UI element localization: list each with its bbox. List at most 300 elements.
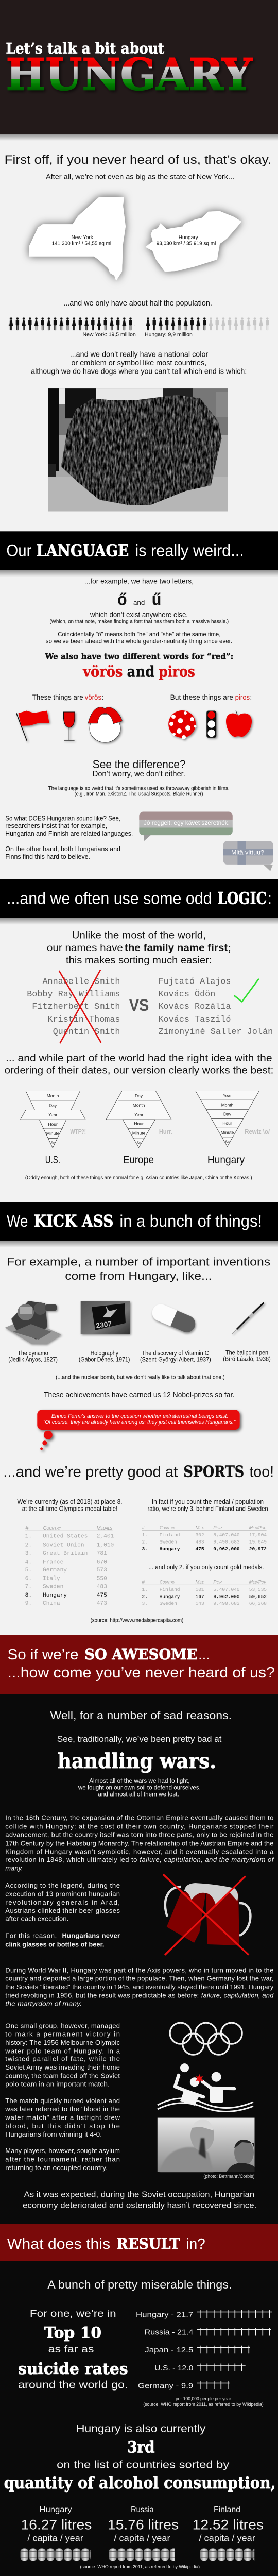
sports text right: In fact if you count the medal / population [152, 1498, 264, 1505]
paragraph: water polo: blood, but this didn’t stop the [5, 2122, 120, 2130]
date chart: Europe: Sc [137, 1141, 141, 1145]
date chart: U.S.: Day [49, 1103, 57, 1108]
table: gold medals per population: Med/Pop [249, 1580, 266, 1585]
table: medals per population: 9,490,683 [213, 1539, 240, 1545]
population labels: Hungary: 9,9 million [145, 332, 193, 338]
see the difference text: See the difference? [93, 758, 185, 771]
icon: apple [226, 711, 252, 737]
table: gold medals per population [142, 1580, 267, 1606]
date chart: Europe: Month [133, 1103, 145, 1108]
names list: hungarian: Zimonyiné Saller Jolán [159, 1027, 273, 1037]
heading: result: RESULT [116, 2235, 180, 2252]
date chart: Hungary: Hour [222, 1121, 232, 1126]
paragraph: water polo: was later referred to the "blood in the [5, 2105, 120, 2113]
names list: hungarian: Kovács Ödön [159, 989, 215, 999]
stat: Hungary alcohol: Hungary [39, 2505, 72, 2514]
finnish text: On the other hand, both Hungarians and [5, 845, 120, 853]
inventions captions: Holography [91, 1351, 118, 1357]
sports heading: ...and we’re pretty good at [3, 1463, 178, 1480]
history paragraph: 16th century: Kingdom of Hungary wasn’t symbiotic, however, and it eventually escalated into a [5, 1848, 274, 1856]
icon row: Hungary people black [146, 317, 209, 330]
sad reasons text: Almost all of the wars we had to fight, [89, 1778, 189, 1784]
table: all time medals: 2. [25, 1543, 32, 1549]
history paragraph: world war II: country and deported a large portion of the populace. Then, when Germany lost the war, [5, 1974, 273, 1982]
table: medals per population: Sweden [160, 1539, 177, 1545]
names list: hungarian [159, 977, 273, 1037]
date chart captions: (Oddly enough, both of these things are normal for e.g. Asian countries like Japan, China or the Koreas.) [25, 1175, 252, 1181]
two letters text: (Which, on that note, makes finding a font that has them both a massive hassle.) [49, 619, 229, 624]
stat: Hungary alcohol [20, 2505, 92, 2561]
chart: suicide rates: Japan - 12.5 [145, 2346, 193, 2354]
history paragraph: 16th century: collide with Hungary: at the cost of their own country, Hungarians stopped their [5, 1823, 274, 1830]
see the difference text: Don’t worry, we don’t either. [93, 770, 185, 778]
red words heading: vörös [82, 663, 123, 680]
heading: logic: LOGIC [217, 889, 267, 908]
alcohol statement: Hungary is also currently [76, 2423, 206, 2435]
table: all time medals: 473 [97, 1601, 107, 1607]
icon: red wine glass [64, 712, 75, 740]
paragraph: water polo: Soviet Army was invading their home [5, 2063, 120, 2071]
table: medals per population: Hungary [160, 1546, 180, 1552]
date chart: U.S.: Sc [51, 1142, 55, 1145]
population comparison [8, 299, 271, 338]
gold medals text: ... and only 2. if you only count gold medals. [149, 1564, 264, 1571]
Hungary label: 93,030 km² / 35,919 sq mi [157, 241, 216, 247]
heading: kick ass: KICK ASS [33, 1212, 113, 1231]
economy text: As it was expected, during the Soviet occupation, Hungarian [24, 2190, 254, 2199]
map: Hungary [145, 211, 241, 272]
alcohol notes: (source: WHO report from 2011, as referred to by Wikipedia) [80, 2564, 200, 2570]
economy text: economy deteriorated and ostensibly hasn’t recovered since. [23, 2201, 256, 2210]
chart note: (source: WHO report from 2011, as referred to by Wikipedia) [143, 2402, 264, 2408]
table: gold medals per population: 53,535 [249, 1587, 267, 1592]
table: medals per population: 5,407,040 [213, 1532, 240, 1538]
history paragraph: world war II: failure, capitulation, and [201, 1991, 274, 1999]
history paragraph: world war II [5, 1966, 274, 2008]
table: medals per population: # [142, 1525, 145, 1531]
sad reasons text: handling wars. [58, 1749, 216, 1773]
finnish text: Hungarian and Finnish are related languages. [5, 829, 133, 837]
date chart captions [25, 1154, 252, 1181]
table: all time medals: Sweden [43, 1584, 63, 1590]
sports text left: We’re currently (as of 2013) at place 8. [17, 1498, 123, 1505]
photo: puli dog [48, 388, 228, 511]
paragraph: water polo: after the tournament, rather than [5, 2156, 120, 2163]
table: medals per population: 1. [142, 1532, 148, 1538]
suicide rate statement: around the world go. [18, 2379, 128, 2391]
date chart captions: Hungary [207, 1154, 245, 1166]
stat: Russia alcohol: 15.76 litres [108, 2517, 179, 2532]
speech bubble: Hungarian [139, 812, 233, 841]
alcohol statement: 3rd [127, 2437, 155, 2457]
table: gold medals per population: 3. [142, 1601, 148, 1606]
icon: polka dot ball [168, 710, 197, 739]
names intro text: our names have [47, 942, 123, 954]
date chart: Europe: Year [134, 1112, 143, 1117]
stat: Russia alcohol [108, 2505, 179, 2561]
heading: so awesome [7, 1646, 275, 1681]
date chart: U.S.: Year [48, 1112, 57, 1117]
red words heading: piros [159, 663, 195, 680]
paragraph: beer legend: Hungarians never [62, 1931, 120, 1939]
inventions captions: The ballpoint pen [225, 1350, 268, 1356]
red cross over western names [59, 970, 101, 1043]
sports text left: at the all time Olympics medal table! [22, 1505, 117, 1512]
sad reasons text: Well, for a number of sad reasons. [50, 1709, 232, 1722]
table: gold medals per population: Country [160, 1580, 176, 1585]
two letters text: which don’t exist anywhere else. [90, 611, 188, 619]
table: gold medals per population: 143 [196, 1601, 204, 1606]
inventions captions: (Szent-Györgyi Albert, 1937) [140, 1357, 211, 1363]
stat: Finland alcohol: 12.52 litres [193, 2517, 264, 2532]
Hungary label: Hungary [179, 235, 198, 241]
sad reasons text: we fought on our own soil to defend ourselves, [78, 1785, 201, 1791]
names list: hungarian: Kovács Rozália [159, 1002, 231, 1012]
two letters text [46, 577, 232, 645]
inventions intro: come from Hungary, like... [65, 1269, 212, 1282]
chart: suicide rates: Russia - 21.4 [145, 2328, 193, 2336]
heading: so awesome: ...how come you’ve never heard of us? [7, 1665, 275, 1681]
table: medals per population: 19,649 [249, 1539, 267, 1545]
sports text right [147, 1498, 268, 1512]
table: gold medals per population: # [142, 1580, 145, 1585]
inventions captions [8, 1350, 271, 1363]
section band: language [0, 531, 278, 577]
date chart: U.S.: Month [47, 1093, 59, 1098]
thought bubble: Fermi quote: Enrico Fermi’s answer to the question whether extraterrestrial beings exist: [51, 1413, 228, 1419]
table: medals per population: Med [196, 1525, 204, 1531]
icon: red-haired head [88, 707, 123, 742]
table: gold medals per population: Med [196, 1580, 204, 1585]
history paragraph: 16th century: advancement, but the country itself was torn into three parts, only to be rejoined in the [5, 1831, 273, 1838]
history paragraph: world war II: During World War II, Hungary was part of the Axis powers, who in turn moved in to the [5, 1966, 273, 1974]
table: all time medals: 670 [97, 1559, 107, 1565]
date chart: Hungary: Day [223, 1112, 232, 1117]
section band: so awesome [0, 1635, 278, 1694]
inventions captions: (Bíró László, 1938) [223, 1357, 271, 1363]
table: all time medals: Medals [97, 1525, 113, 1531]
chart: suicide rates: Germany - 9.9 [138, 2381, 193, 2391]
date chart label: WTF: WTF?! [70, 1128, 86, 1136]
New York label: 141,300 km² / 54,55 sq mi [51, 241, 111, 247]
finnish text: researchers insist that for example, [5, 822, 107, 829]
date chart: Hungary: Minute [221, 1130, 234, 1135]
table: gold medals per population: Sweden [160, 1601, 177, 1606]
heading: result: What does this [7, 2236, 110, 2252]
paragraph: water polo: polo team in an important match. [5, 2080, 110, 2088]
speech bubble: Finnish: Mitä vittuu? [231, 849, 264, 856]
names intro text: Unlike the most of the world, [72, 930, 206, 941]
barrels: Finland [200, 2548, 254, 2561]
table: all time medals: 9. [25, 1601, 32, 1607]
table: all time medals: 7. [25, 1584, 32, 1590]
table: all time medals: 1. [25, 1534, 32, 1540]
table: gold medals per population: 9,490,683 [213, 1601, 240, 1606]
red words heading [45, 652, 233, 680]
finnish text: So what DOES Hungarian sound like? See, [5, 815, 120, 822]
stat: Russia alcohol: Russia [131, 2505, 154, 2514]
sports heading: too! [249, 1463, 274, 1480]
names intro text [47, 930, 231, 966]
icon row: Hungary people grey [209, 317, 272, 330]
speech bubble: Hungarian: Jó reggelt, egy kávét szeretnék. [144, 819, 230, 826]
table: all time medals [25, 1525, 114, 1607]
table: all time medals: China [43, 1601, 60, 1607]
names intro text: this makes sorting much easier: [66, 955, 212, 966]
sports heading [3, 1463, 274, 1481]
table: all time medals: Soviet Union [43, 1543, 84, 1549]
title: HUNGARY: HUNGARY [6, 49, 253, 101]
names list: western: Annabelle Smith [42, 977, 120, 987]
table: all time medals: France [43, 1559, 63, 1565]
paragraph: water polo: to mark a permanent victory in [5, 2030, 120, 2038]
section band: kick ass [0, 1202, 278, 1247]
paragraph: water polo: history: The 1956 Melbourne Olympic [5, 2039, 120, 2046]
stat: Russia alcohol: / capita / year [114, 2533, 170, 2543]
heading: language: LANGUAGE [37, 541, 129, 561]
suicide rate statement: Top 10 [44, 2324, 101, 2342]
New York label: New York [71, 235, 94, 241]
nobel text: These achievements have earned us 12 Nobel-prizes so far. [44, 1391, 234, 1399]
history paragraph: 16th century: revolution in 1848, which ultimately led to [5, 1856, 137, 1863]
see the difference text: The language is so weird that it’s sometimes used as throwaway gibberish in films. [48, 785, 230, 791]
names list: western [27, 977, 120, 1037]
suicide rate statement: as far as [48, 2344, 94, 2355]
history paragraph: 16th century [5, 1814, 274, 1872]
paragraph: beer legend: Austrians clinked their beer glasses [5, 1907, 120, 1914]
inventions captions: The discovery of Vitamin C [142, 1351, 209, 1357]
paragraph: beer legend [5, 1882, 120, 1948]
heading: result [7, 2235, 205, 2252]
icon: red flag [16, 711, 49, 741]
paragraph: beer legend: revolutionary generals in Arad, [5, 1899, 120, 1906]
names list: western: Bobby Ray Williams [27, 990, 120, 999]
table: all time medals: 781 [97, 1551, 107, 1557]
column heads: vörös and piros: But these things are [170, 693, 233, 701]
green check [234, 979, 259, 1002]
two letters text: Coincidentally "ő" means both "he" and "she" at the same time, [58, 631, 220, 638]
table: all time medals: Country [43, 1525, 61, 1531]
section band: logic [0, 879, 278, 925]
heading: kick ass: We [7, 1212, 28, 1230]
table: gold medals per population: 9,962,000 [213, 1594, 240, 1600]
paragraph: water polo: water polo team of Hungary. In a [5, 2047, 120, 2055]
date chart: Europe: Hour [134, 1121, 144, 1126]
paragraph: water polo: country, the team faced off the Soviet [5, 2072, 120, 2079]
inventions intro [7, 1255, 270, 1282]
table: gold medals per population: Hungary [160, 1594, 180, 1600]
table: medals per population [142, 1525, 267, 1552]
date chart: Hungary: Sc [225, 1141, 230, 1144]
date chart: Europe: Minute [132, 1130, 146, 1136]
chart note: per 100,000 people per year [176, 2396, 231, 2402]
column heads: vörös and piros: piros [235, 693, 250, 701]
cross bars: Russia [197, 2329, 271, 2332]
photo: bloodied water polo player [158, 2118, 254, 2172]
table: all time medals: 573 [97, 1567, 107, 1573]
heading: kick ass: in a bunch of things! [119, 1212, 262, 1230]
dates intro: ordering of their dates, our version clearly works the best: [5, 1065, 273, 1076]
inventions captions: (Gábor Dénes, 1971) [79, 1357, 130, 1363]
table: gold medals per population: 2. [142, 1594, 148, 1600]
heading: logic: : [267, 889, 272, 908]
history paragraph: world war II: the Soviets "liberated" the country in 1945, and eventually stayed there until 1991. Hungary [5, 1983, 274, 1991]
table: all time medals: 4. [25, 1559, 32, 1565]
table: gold medals per population: 167 [196, 1594, 204, 1600]
names list: western: Quentin Smith [53, 1027, 120, 1037]
see the difference text: (e.g., Iron Man, eXistenZ, The Usual Suspects, Blade Runner) [75, 791, 203, 798]
date chart: Europe [106, 1091, 171, 1148]
heading: kick ass [7, 1212, 262, 1231]
paragraph: water polo: Hungarians from winning it 4-0. [5, 2130, 102, 2138]
icon: olympic rings [170, 2023, 242, 2055]
paragraph: beer legend: after each execution. [5, 1915, 68, 1923]
image: vitamin C pill [150, 1301, 198, 1335]
history paragraph: world war II: the martyrdom of many. [5, 2000, 82, 2008]
sports text right: ratio, we’re only 3. behind Finland and Sweden [147, 1505, 268, 1512]
stat: Finland alcohol: / capita / year [199, 2533, 255, 2543]
table: medals per population: 483 [196, 1539, 204, 1545]
paragraph: water polo: The match quickly turned violent and [5, 2097, 120, 2105]
inventions captions: The dynamo [18, 1351, 48, 1357]
paragraph: beer legend: According to the legend, during the [5, 1882, 120, 1889]
chart note [143, 2396, 264, 2408]
table: medals per population: 17,904 [249, 1532, 267, 1538]
table: gold medals per population: 66,368 [249, 1601, 267, 1606]
table: gold medals per population: Pop [213, 1580, 222, 1585]
sports heading: SPORTS [183, 1463, 244, 1481]
two letters text: ő [117, 589, 127, 608]
heading: so awesome: So if we’re [7, 1647, 78, 1663]
table: all time medals: 1,010 [97, 1543, 114, 1549]
barrels: Hungary [20, 2548, 91, 2561]
sad reasons text [50, 1709, 232, 1798]
table: gold medals per population: 1. [142, 1587, 148, 1592]
speech bubble: Finnish [223, 841, 273, 871]
heading: result: in? [186, 2236, 205, 2252]
table: medals per population: 2. [142, 1539, 148, 1545]
stat: Finland alcohol: Finland [214, 2505, 240, 2514]
thought bubble: Fermi quote: “Of course, they are already here among us: they just call themselves Hungarians.” [43, 1419, 236, 1426]
see the difference text [48, 758, 230, 798]
history paragraph: 16th century: many. [5, 1864, 23, 1872]
paragraph: water polo: water match" after a fistfight drew [5, 2114, 120, 2122]
sad reasons text: See, traditionally, we’ve been pretty bad at [57, 1735, 222, 1744]
alcohol statement: on the list of countries sorted by [57, 2459, 229, 2470]
image: hologram: 2307 [95, 1319, 112, 1330]
population labels: New York: 19,5 million [82, 332, 136, 338]
table: all time medals: 2,401 [97, 1534, 114, 1540]
two letters text: ű [152, 589, 161, 608]
table: medals per population: 475 [196, 1546, 204, 1552]
table: all time medals: 550 [97, 1575, 107, 1582]
two letters text: and [133, 598, 145, 606]
table: all time medals: 475 [97, 1592, 107, 1599]
nobel text: (...and the nuclear bomb, but we don’t really like to talk about that one.) [56, 1374, 225, 1380]
date chart captions: U.S. [45, 1154, 60, 1166]
barrels: Russia [109, 2548, 175, 2561]
table: all time medals: 483 [97, 1584, 107, 1590]
table: all time medals: Hungary [43, 1592, 67, 1599]
table: gold medals per population: 5,407,040 [213, 1587, 240, 1592]
stat: Finland alcohol [193, 2505, 264, 2561]
table: gold medals per population: 101 [196, 1587, 204, 1592]
national color text: or emblem or symbol like most countries, [71, 359, 206, 367]
column heads: vörös and piros: These things are [32, 693, 83, 701]
icon: water polo players [158, 2063, 253, 2112]
table: gold medals per population: 59,652 [249, 1594, 267, 1600]
table: all time medals: 8. [25, 1592, 32, 1599]
finnish text [5, 815, 133, 860]
suicide rate statement: For one, we’re in [30, 2308, 116, 2319]
alcohol statement [4, 2423, 276, 2493]
dates intro [5, 1053, 273, 1076]
population comparison: ...and we only have about half the population. [63, 299, 212, 308]
icon row: New York people [8, 317, 135, 330]
chart: suicide rates: U.S. - 12.0 [154, 2364, 193, 2372]
cross bars: Germany [197, 2383, 230, 2385]
date chart: U.S. [21, 1091, 85, 1148]
date chart label: Rewlz: Rewlz \o/ [245, 1128, 270, 1136]
image: dynamo [5, 1301, 61, 1344]
table: all time medals: # [25, 1525, 29, 1531]
names list: western: Fitzherbert Smith [32, 1002, 120, 1012]
column heads: vörös and piros: vörös [85, 693, 101, 701]
date chart: Hungary: Month [221, 1102, 234, 1107]
table: all time medals: 3. [25, 1551, 32, 1557]
table: medals per population: Finland [160, 1532, 180, 1538]
thought bubble: Fermi quote [37, 1410, 240, 1450]
two letters text: so we’ve been ahead with the whole gender-neutrality thing since ever. [46, 637, 232, 645]
heading: logic: ...and we often use some odd [7, 889, 212, 908]
versus label: VS [129, 996, 149, 1014]
column heads: vörös and piros: : [250, 693, 252, 701]
history paragraph: 16th century: In the 16th Century, the expansion of the Ottoman Empire eventually caused them to [5, 1814, 273, 1822]
suicide rate statement: suicide rates [18, 2360, 128, 2378]
economy text [23, 2190, 256, 2210]
date chart: U.S.: Hour [48, 1122, 58, 1127]
map: New York [29, 197, 126, 281]
table: medals per population: Pop [213, 1525, 222, 1531]
icon: traffic light [206, 711, 216, 738]
chart: suicide rates [136, 2311, 272, 2408]
national color text [31, 350, 247, 376]
table: medals per population: 9,962,000 [213, 1546, 240, 1552]
title: let's talk: Let’s talk a bit about [6, 40, 164, 57]
names list: hungarian: Kovács Tasziló [159, 1015, 231, 1025]
paragraph: beer legend: execution of 13 prominent hungarian [5, 1890, 120, 1898]
table: medals per population: 3. [142, 1546, 148, 1552]
table: medals per population: Country [160, 1525, 176, 1531]
two letters text: ...for example, we have two letters, [84, 577, 194, 585]
dark background panel [0, 1694, 278, 2576]
red words heading: We also have two different words for “red”: [45, 652, 233, 662]
sad reasons text: and almost all of them we lost. [98, 1791, 179, 1798]
source line: (source: http://www.medalspercapita.com) [91, 1618, 183, 1624]
national color text: ...and we don’t really have a national color [70, 350, 208, 359]
cross bars: U.S. [197, 2365, 246, 2367]
history paragraph: world war II: tried revolting in 1956, but the result was predictable as before: [5, 1991, 199, 1999]
date chart: Hungary [196, 1091, 259, 1147]
column heads: vörös and piros: : [101, 693, 103, 701]
stat: Hungary alcohol: 16.27 litres [21, 2517, 92, 2532]
heading: language [6, 541, 244, 561]
table: all time medals: 6. [25, 1575, 32, 1582]
paragraph: water polo: returning to an occupied country. [5, 2164, 108, 2172]
names list: hungarian: Fujtató Alajos [159, 977, 231, 987]
heading: so awesome: ... [198, 1647, 210, 1663]
section band: result [0, 2224, 278, 2261]
